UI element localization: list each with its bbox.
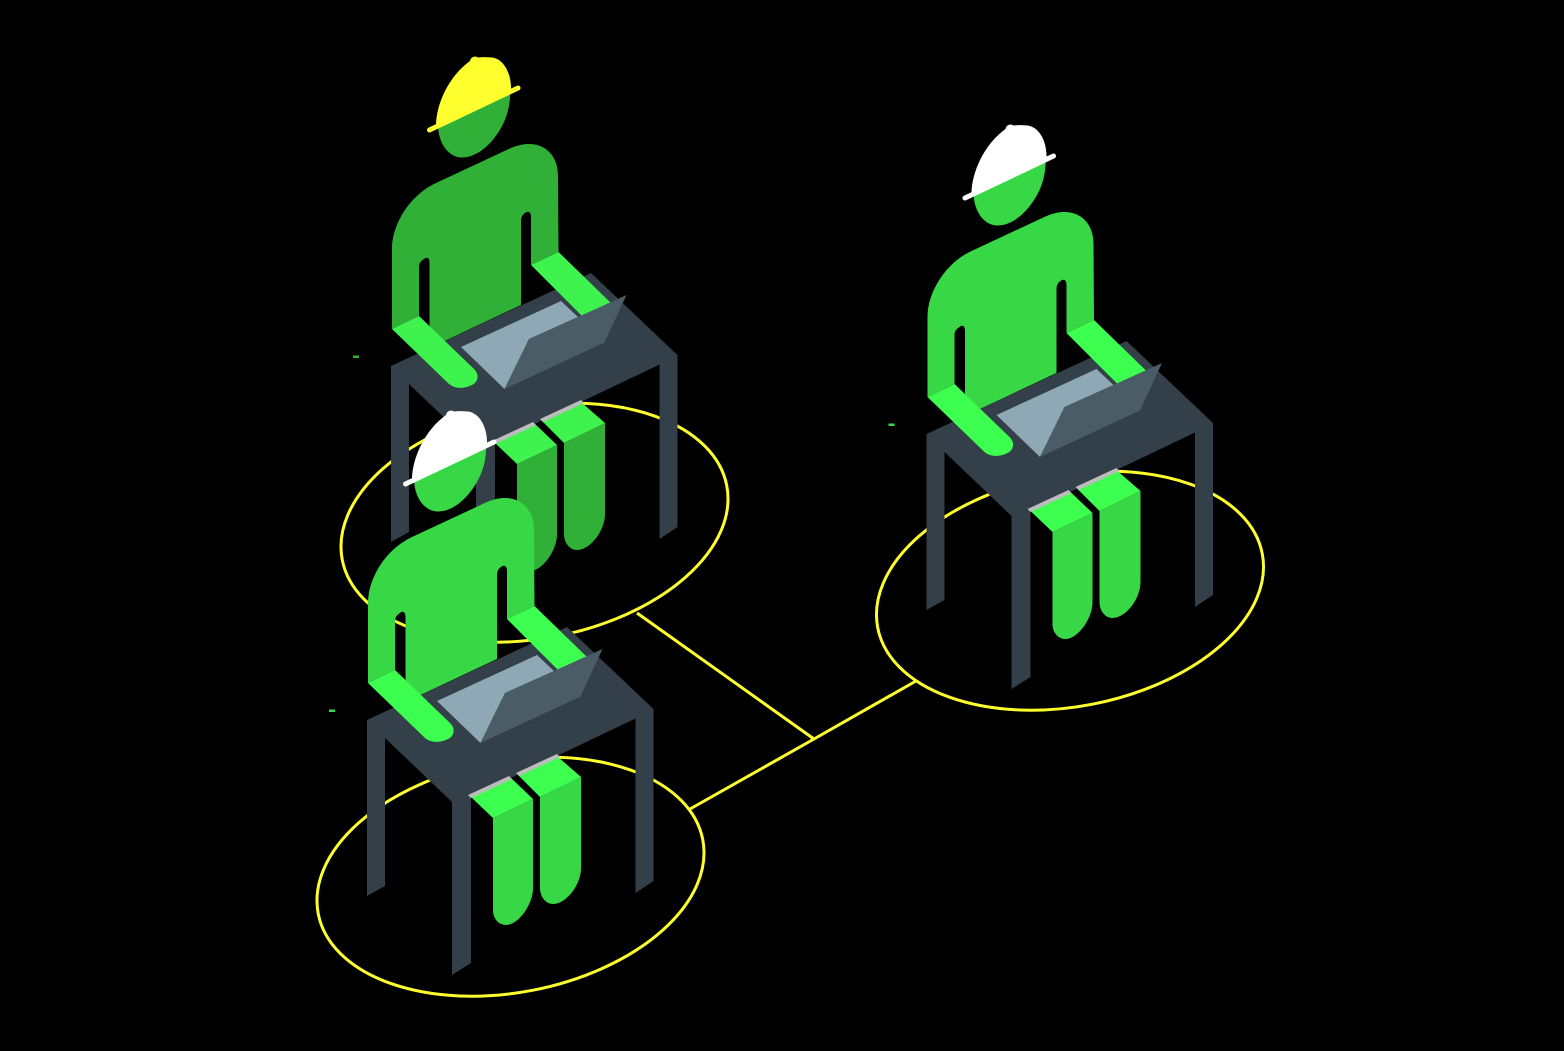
torso and upper arms <box>928 212 1094 416</box>
laptop screen <box>1040 363 1162 457</box>
leg top faces <box>471 757 581 818</box>
legs <box>1030 471 1140 639</box>
ring around worker 2 <box>856 440 1284 741</box>
worker 2: white helmet, right <box>856 125 1284 741</box>
ring around worker 1 <box>320 372 749 673</box>
small mark <box>888 424 894 426</box>
forearm left <box>928 384 1013 456</box>
head <box>438 89 510 158</box>
leg front <box>1052 513 1092 639</box>
small mark <box>329 710 335 712</box>
leg top faces <box>1030 471 1140 532</box>
leg front <box>493 799 533 925</box>
forearm right <box>507 606 587 670</box>
leg front <box>517 445 557 571</box>
legs <box>471 757 581 925</box>
laptop keyboard <box>461 301 578 389</box>
torso and upper arms <box>368 498 534 702</box>
forearm left <box>368 670 454 742</box>
forearm right <box>531 252 611 316</box>
seat edge strips <box>492 400 584 444</box>
laptop keyboard <box>996 369 1114 457</box>
connection lines between the three workers <box>637 613 916 809</box>
leg rear <box>540 777 581 904</box>
desk <box>391 273 678 621</box>
torso and upper arms <box>392 144 558 348</box>
helmet <box>965 125 1054 198</box>
worker 1: yellow helmet, back left <box>320 57 749 673</box>
laptop screen <box>480 649 602 743</box>
forearm left <box>392 316 478 388</box>
leg rear <box>564 423 605 550</box>
small mark <box>353 356 359 358</box>
legs <box>495 403 605 571</box>
laptop screen <box>504 295 626 389</box>
desk <box>926 341 1213 689</box>
worker 3: white helmet, front left <box>296 411 725 1027</box>
leg top faces <box>495 403 605 464</box>
leg rear <box>1100 491 1140 618</box>
laptop keyboard <box>437 655 554 743</box>
ring around worker 3 <box>296 726 725 1027</box>
forearm right <box>1066 320 1146 384</box>
helmet <box>430 57 518 130</box>
desk <box>367 627 654 975</box>
head <box>974 157 1046 226</box>
seat edge strips <box>1028 468 1120 512</box>
helmet <box>406 411 494 484</box>
seat edge strips <box>468 754 560 798</box>
head <box>414 443 486 512</box>
